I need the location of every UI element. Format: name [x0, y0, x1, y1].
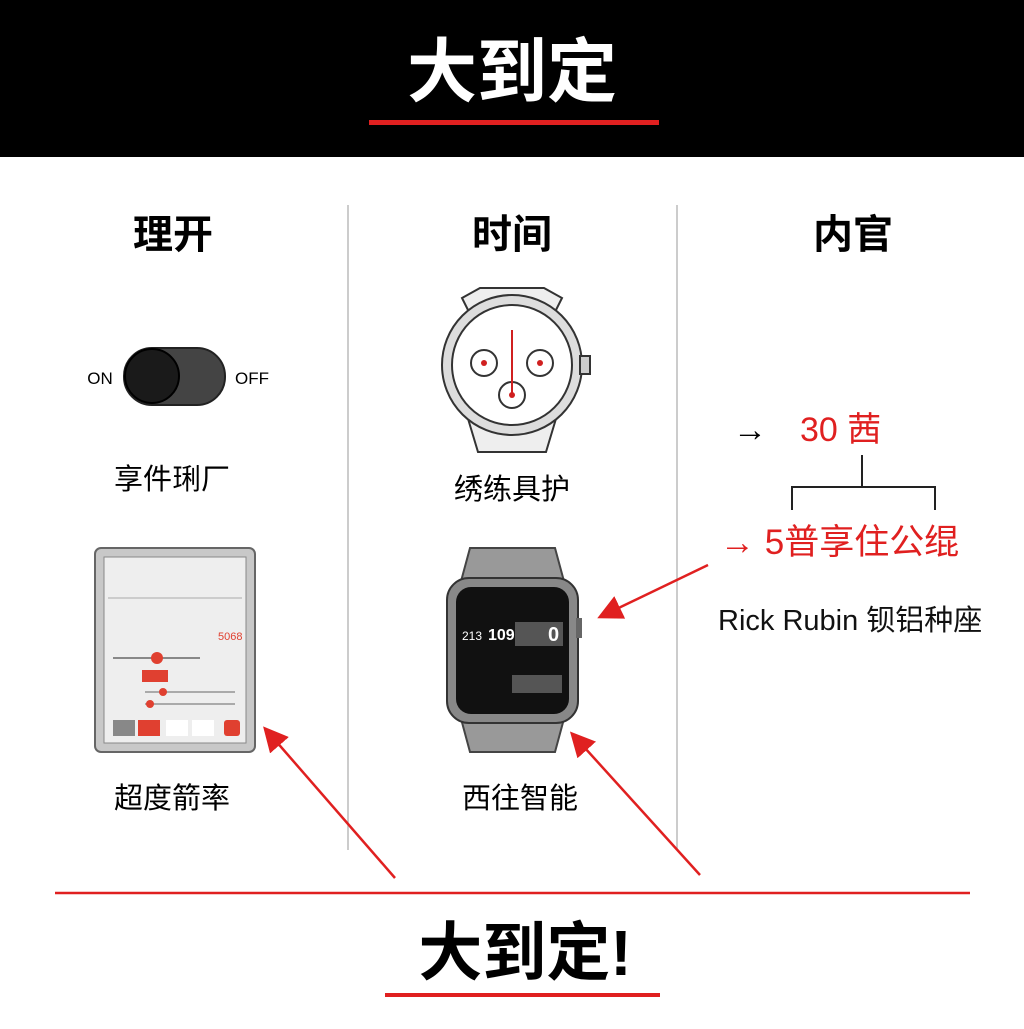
toggle switch: ON: [87, 369, 113, 388]
icon: smartwatch: 213: [462, 629, 482, 643]
icon: smartwatch: [447, 548, 582, 752]
arrow + number callout: 30 茜: [800, 411, 881, 449]
column heading: right: 内官: [813, 213, 893, 257]
caption: Rick Rubin: Rick Rubin 钡铝种座: [718, 604, 982, 637]
label: tablet: 超度箭率: [114, 782, 230, 815]
column heading: middle: 时间: [472, 213, 552, 257]
arrows: [268, 565, 708, 878]
title: 大到定: [407, 33, 617, 111]
icon: tablet: [95, 548, 255, 752]
header bar: [0, 0, 1024, 157]
toggle switch: [87, 348, 269, 405]
icon: chronograph watch: [442, 288, 590, 452]
bottom title: 大到定!: [418, 917, 632, 989]
label: toggle: 享件琍厂: [114, 463, 230, 496]
red callout: → 5普享住公绲: [720, 523, 959, 562]
toggle switch: OFF: [235, 369, 269, 388]
bottom title: [385, 917, 660, 997]
label: smartwatch: 西往智能: [462, 782, 578, 815]
column heading: left: 理开: [133, 213, 213, 257]
icon: smartwatch: 109: [488, 627, 515, 644]
bracket: [792, 455, 935, 510]
icon: tablet: 5068: [218, 631, 242, 643]
label: chronograph: 绣练具护: [454, 473, 570, 506]
icon: smartwatch: 0: [548, 624, 559, 646]
arrow + number callout: [733, 411, 881, 449]
arrow + number callout: →: [733, 411, 767, 449]
